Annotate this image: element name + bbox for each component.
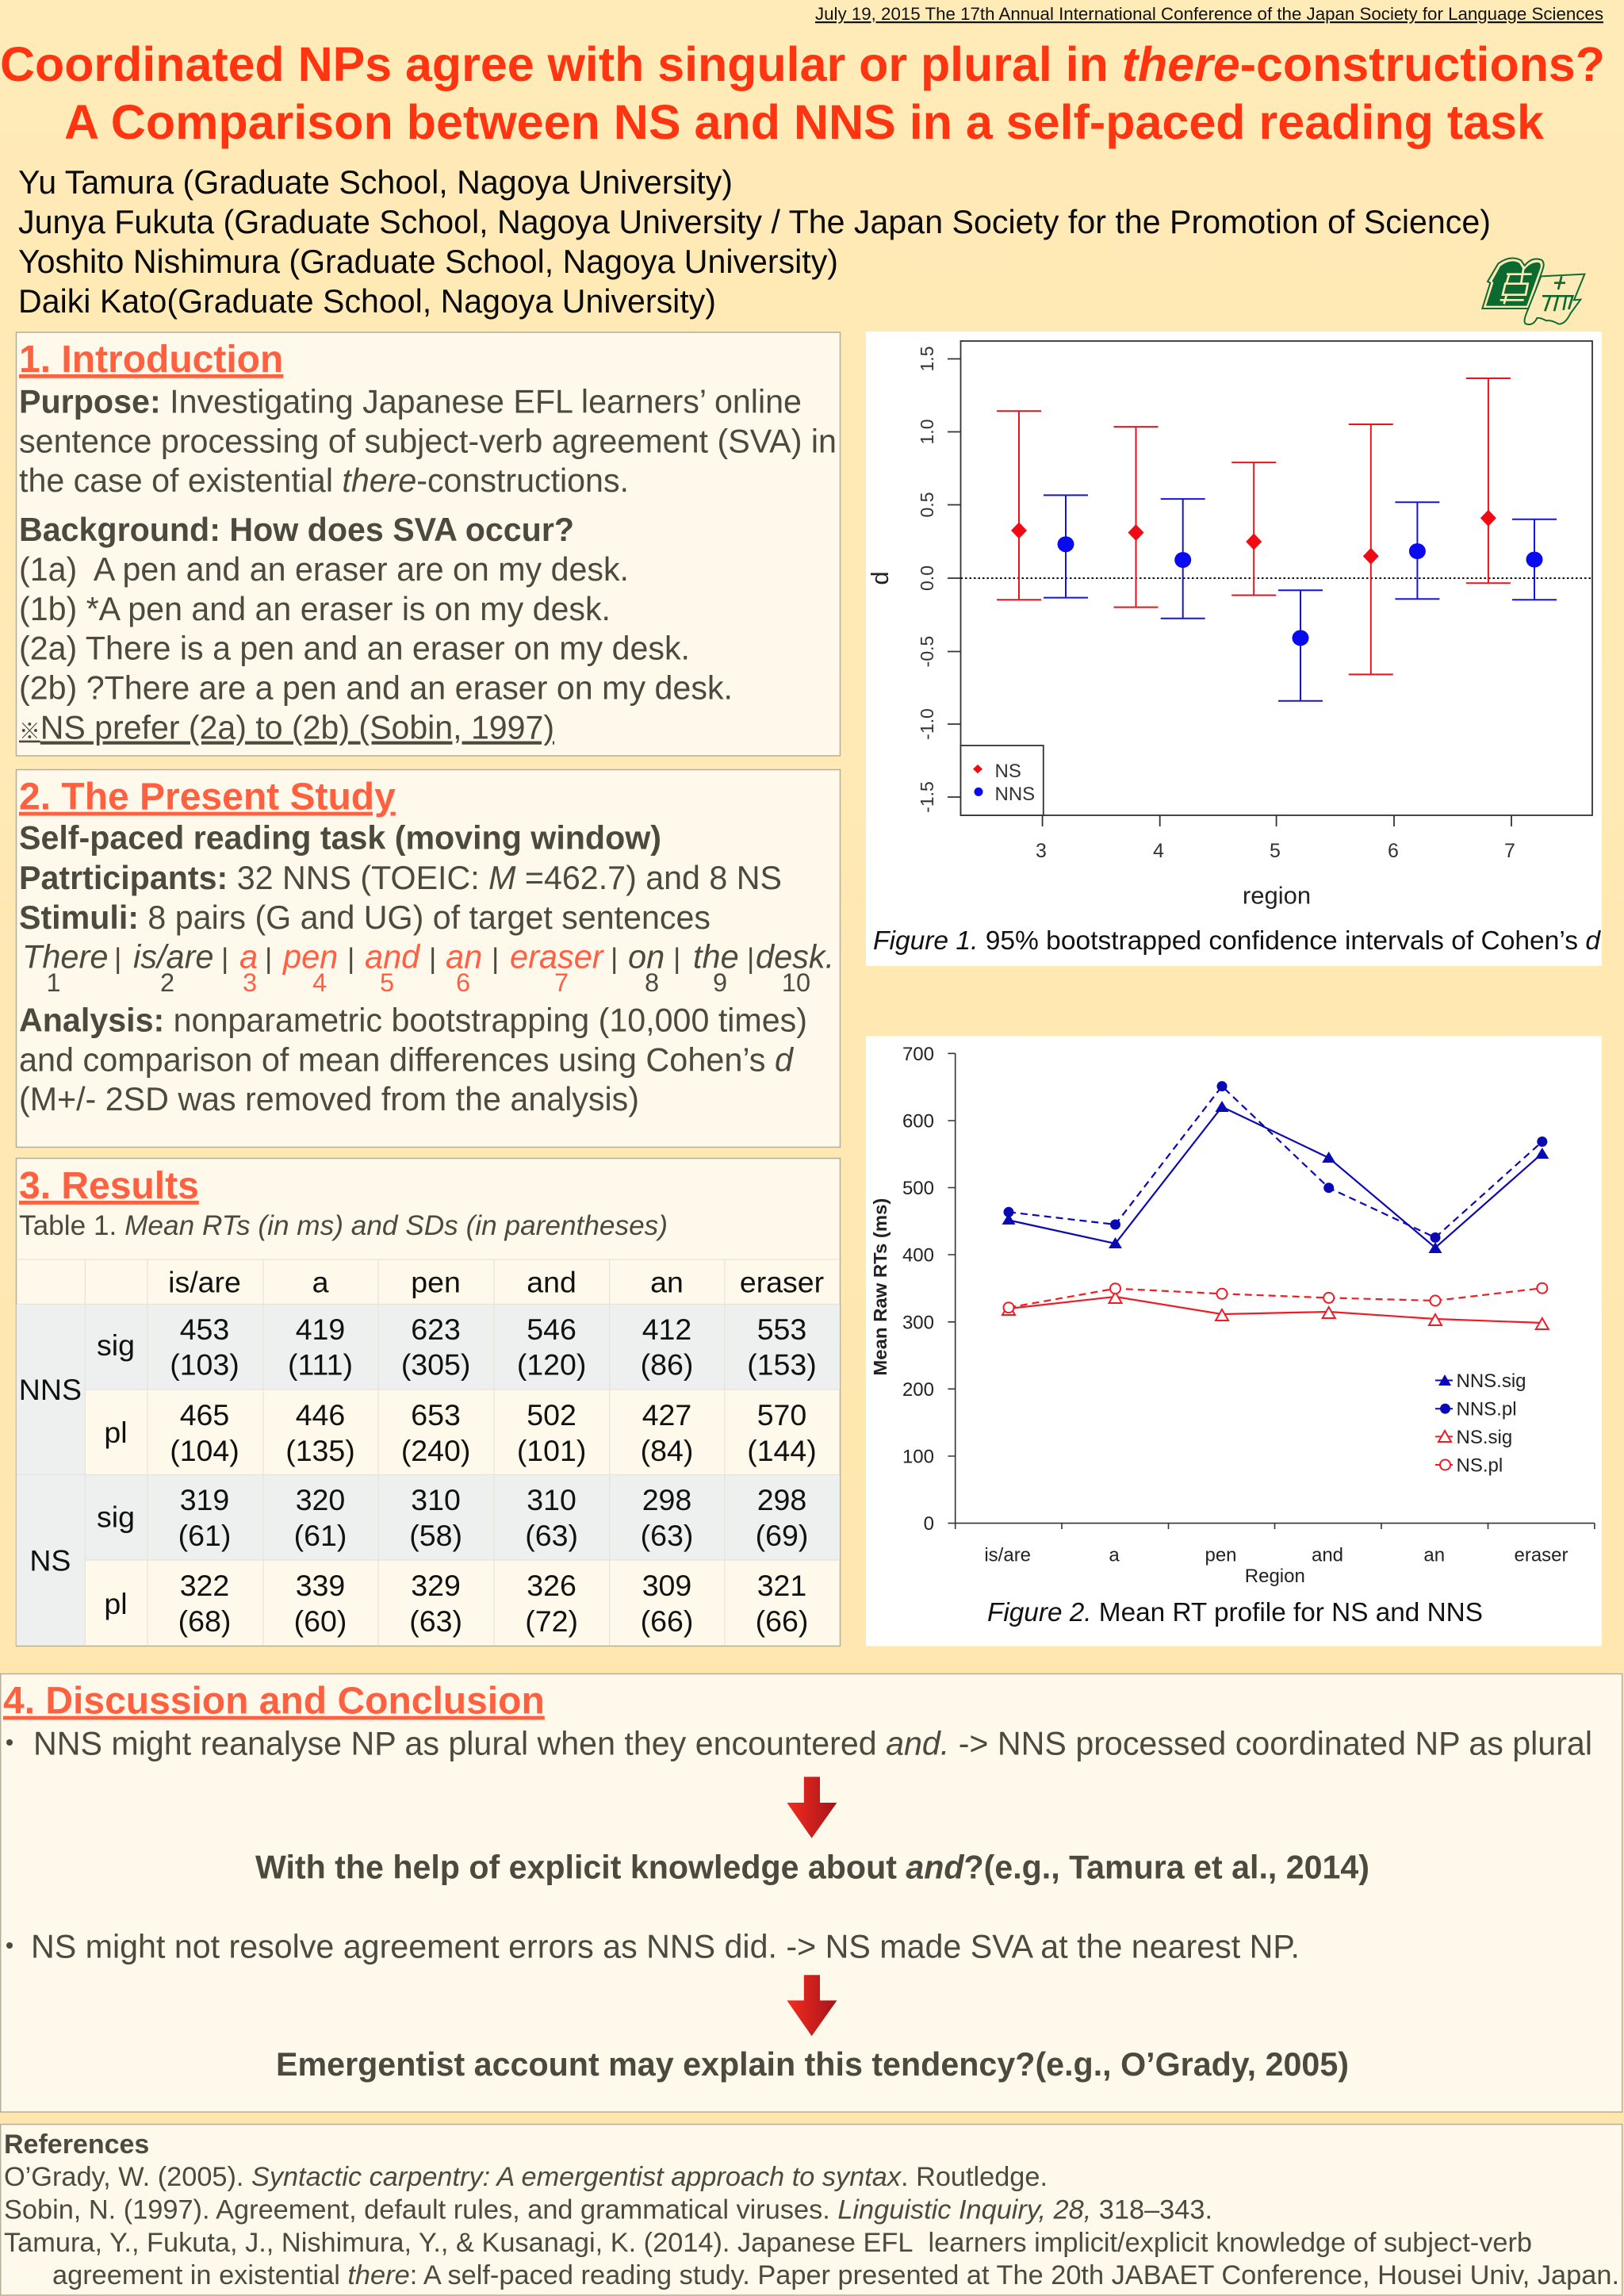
example sentence with regions: |: [673, 942, 680, 975]
chart: confidence intervals of Cohen's d: 6: [1388, 840, 1399, 862]
icon: university logo: [1482, 258, 1584, 324]
text: background examples: ※NS prefer (2a) to (2b) (Sobin, 1997): [19, 709, 554, 746]
table of mean RTs: (63): [641, 1519, 693, 1552]
table of mean RTs: (63): [525, 1519, 578, 1552]
reference list: O’Grady, W. (2005). Syntactic carpentry: A emergentist approach to syntax. Routledge.: [4, 2162, 1048, 2192]
table of mean RTs: 320: [296, 1483, 345, 1516]
text: method lines: [19, 819, 782, 936]
text: method lines: Stimuli: 8 pairs (G and UG) of target sentences: [19, 899, 710, 936]
region numbers: [46, 968, 810, 997]
table of mean RTs: 298: [757, 1483, 806, 1516]
example sentence with regions: a: [239, 938, 258, 976]
chart: confidence intervals of Cohen's d: 1.0: [917, 420, 937, 444]
table of mean RTs: sig: [97, 1328, 135, 1362]
table of mean RTs: (66): [641, 1604, 693, 1638]
region numbers: 9: [713, 968, 727, 997]
text: purpose: sentence processing of subject-verb agreement (SVA) in: [19, 422, 837, 459]
table of mean RTs: 453: [180, 1313, 229, 1346]
line chart: mean RT profile: 200: [902, 1379, 934, 1401]
chart: confidence intervals of Cohen's d: 4: [1153, 840, 1164, 862]
table of mean RTs: 321: [757, 1569, 806, 1602]
table caption: Table 1. Mean RTs (in ms) and SDs (in parentheses): [19, 1210, 668, 1241]
table of mean RTs: 310: [411, 1483, 461, 1516]
title: Coordinated NPs agree with singular or plural in there-constructions?: [0, 37, 1605, 91]
region numbers: 4: [312, 968, 327, 997]
text: method lines: Self-paced reading task (moving window): [19, 819, 661, 857]
reference list: Tamura, Y., Fukuta, J., Nishimura, Y., & Kusanagi, K. (2014). Japanese EFL learners implicit/explicit knowledge of subject-verb: [4, 2228, 1532, 2258]
table of mean RTs: pen: [411, 1266, 461, 1299]
chart: confidence intervals of Cohen's d: -0.5: [917, 636, 937, 667]
panel: introduction: [16, 332, 841, 756]
table of mean RTs: 546: [527, 1313, 576, 1346]
table of mean RTs: (240): [401, 1434, 470, 1467]
table of mean RTs: a: [312, 1266, 329, 1299]
table of mean RTs: (120): [517, 1348, 586, 1382]
table of mean RTs: (104): [170, 1434, 239, 1467]
heading: introduction: 1. Introduction: [19, 339, 283, 381]
authors: Daiki Kato(Graduate School, Nagoya University): [18, 282, 716, 320]
conclusion: emergentist account: Emergentist account may explain this tendency?(e.g., O’Grady, 2005): [276, 2045, 1349, 2083]
chart: confidence intervals of Cohen's d: 1.5: [917, 347, 937, 371]
table of mean RTs: sig: [97, 1501, 135, 1534]
example sentence with regions: |: [347, 942, 354, 975]
legend: [1435, 1370, 1526, 1477]
legend: NNS.pl: [1456, 1399, 1517, 1420]
table of mean RTs: 553: [757, 1313, 806, 1346]
table of mean RTs: 419: [296, 1313, 345, 1346]
table of mean RTs: (66): [756, 1604, 808, 1638]
legend: NNS: [994, 784, 1035, 805]
line chart: mean RT profile: Mean Raw RTs (ms): [870, 1198, 891, 1376]
chart: confidence intervals of Cohen's d: -1.5: [917, 781, 937, 813]
table of mean RTs: (135): [285, 1434, 355, 1467]
chart: confidence intervals of Cohen's d: 3: [1036, 840, 1047, 862]
line chart: mean RT profile: [870, 1044, 1595, 1587]
table of mean RTs: [17, 1259, 840, 1645]
table of mean RTs: (58): [409, 1519, 462, 1552]
text: background examples: (2b) ?There are a pen and an eraser on my desk.: [19, 669, 733, 706]
table of mean RTs: (111): [288, 1348, 353, 1382]
table of mean RTs: 322: [180, 1569, 229, 1602]
line chart: mean RT profile: 500: [902, 1178, 934, 1199]
arrow: [787, 1975, 837, 2036]
table of mean RTs: (305): [401, 1348, 470, 1382]
line chart: mean RT profile: 700: [902, 1044, 934, 1065]
region numbers: 3: [243, 968, 257, 997]
table of mean RTs: (68): [178, 1604, 231, 1638]
line chart: mean RT profile: 400: [902, 1245, 934, 1266]
example sentence with regions: There: [22, 938, 108, 976]
line chart: mean RT profile: 300: [902, 1312, 934, 1333]
text: purpose: the case of existential there-constructions.: [19, 462, 629, 499]
reference list: [4, 2162, 1619, 2290]
table of mean RTs: 623: [411, 1313, 461, 1346]
region numbers: 7: [554, 968, 569, 997]
table of mean RTs: pl: [104, 1416, 128, 1449]
table of mean RTs: (60): [294, 1604, 347, 1638]
references heading: References: [4, 2129, 149, 2160]
line chart: mean RT profile: pen: [1205, 1545, 1237, 1566]
bullet: NNS reanalysis: NNS might reanalyse NP as plural when they encountered and. -> NNS processed coordinated NP as plural: [33, 1724, 1592, 1762]
example sentence with regions: |: [611, 942, 618, 975]
table of mean RTs: an: [650, 1266, 684, 1299]
example sentence with regions: |: [221, 942, 228, 975]
conclusion: explicit knowledge: With the help of explicit knowledge about and?(e.g., Tamura et al., 2014): [255, 1848, 1369, 1886]
table of mean RTs: 298: [642, 1483, 691, 1516]
table of mean RTs: 339: [296, 1569, 345, 1602]
region numbers: 6: [456, 968, 470, 997]
line chart: mean RT profile: is/are: [984, 1545, 1031, 1566]
text: analysis: (M+/- 2SD was removed from the analysis): [19, 1080, 639, 1117]
line chart: mean RT profile: and: [1312, 1545, 1343, 1566]
title: [0, 37, 1605, 149]
text: analysis: Analysis: nonparametric bootstrapping (10,000 times): [19, 1002, 807, 1039]
table of mean RTs: (61): [178, 1519, 231, 1552]
line chart: mean RT profile: 100: [902, 1447, 934, 1467]
table of mean RTs: (153): [747, 1348, 817, 1382]
region numbers: 8: [645, 968, 659, 997]
text: analysis: [19, 1002, 807, 1117]
table of mean RTs: (144): [747, 1434, 817, 1467]
table of mean RTs: 653: [411, 1398, 461, 1432]
legend: [961, 746, 1044, 815]
example sentence with regions: [22, 938, 834, 976]
example sentence with regions: |: [429, 942, 436, 975]
table of mean RTs: NNS: [19, 1373, 82, 1406]
figure 2 caption: Figure 2. Mean RT profile for NS and NNS: [987, 1598, 1483, 1627]
table of mean RTs: (103): [170, 1348, 239, 1382]
example sentence with regions: eraser: [510, 938, 605, 976]
bullet: NS agreement: NS might not resolve agreement errors as NNS did. -> NS made SVA at the nearest NP.: [31, 1927, 1300, 1965]
chart: confidence intervals of Cohen's d: region: [1243, 882, 1311, 910]
line chart: mean RT profile: an: [1423, 1545, 1445, 1566]
table of mean RTs: (101): [517, 1434, 586, 1467]
table of mean RTs: and: [527, 1266, 576, 1299]
table of mean RTs: 310: [527, 1483, 576, 1516]
table of mean RTs: 309: [642, 1569, 691, 1602]
line chart: mean RT profile: 600: [902, 1110, 934, 1133]
table of mean RTs: 329: [411, 1569, 461, 1602]
table of mean RTs: 326: [527, 1569, 576, 1602]
region numbers: 10: [782, 968, 810, 997]
table of mean RTs: (69): [756, 1519, 808, 1552]
conference date line: July 19, 2015 The 17th Annual International Conference of the Japan Society for Language Sciences: [815, 4, 1603, 24]
chart: confidence intervals of Cohen's d: 0.5: [917, 493, 937, 517]
example sentence with regions: |: [114, 942, 121, 975]
text: purpose: [19, 382, 837, 499]
chart: confidence intervals of Cohen's d: d: [866, 571, 894, 585]
line chart: mean RT profile: eraser: [1514, 1545, 1568, 1566]
panel: the present study: [16, 769, 841, 1147]
legend: NNS.sig: [1456, 1370, 1526, 1392]
table of mean RTs: (84): [641, 1434, 693, 1467]
title: A Comparison between NS and NNS in a self-paced reading task: [64, 95, 1544, 149]
reference list: agreement in existential there: A self-paced reading study. Paper presented at The 20th JABAET Conference, Housei Univ, Japan.: [52, 2260, 1619, 2290]
text: purpose: Purpose: Investigating Japanese EFL learners’ online: [19, 382, 802, 420]
authors: Yu Tamura (Graduate School, Nagoya University): [18, 163, 733, 201]
text: background examples: (1a) A pen and an eraser are on my desk.: [19, 550, 629, 588]
heading: results: 3. Results: [19, 1165, 199, 1207]
region numbers: 2: [160, 968, 174, 997]
text: background examples: (2a) There is a pen and an eraser on my desk.: [19, 630, 690, 667]
panel: results: [16, 1158, 841, 1646]
text: background examples: Background: How does SVA occur?: [19, 511, 574, 548]
heading: discussion: 4. Discussion and Conclusion: [3, 1681, 545, 1723]
example sentence with regions: on: [628, 938, 665, 976]
chart: confidence intervals of Cohen's d: 0.0: [917, 565, 937, 591]
table of mean RTs: eraser: [740, 1266, 824, 1299]
table of mean RTs: NS: [29, 1544, 71, 1577]
line chart: mean RT profile: a: [1109, 1545, 1120, 1566]
region numbers: 5: [380, 968, 394, 997]
heading: present study: 2. The Present Study: [19, 776, 396, 818]
figure 1 caption: Figure 1. 95% bootstrapped confidence intervals of Cohen’s d: [873, 926, 1601, 956]
table of mean RTs: (61): [294, 1519, 347, 1552]
legend: NS: [994, 761, 1021, 782]
table of mean RTs: is/are: [168, 1266, 241, 1299]
example sentence with regions: is/are: [133, 938, 213, 976]
chart: confidence intervals of Cohen's d: 7: [1504, 840, 1515, 862]
line chart: mean RT profile: Region: [1245, 1566, 1305, 1587]
table of mean RTs: 570: [757, 1398, 806, 1432]
table of mean RTs: (72): [525, 1604, 578, 1638]
authors: [18, 163, 1491, 320]
table of mean RTs: 319: [180, 1483, 229, 1516]
example sentence with regions: and: [365, 938, 421, 976]
table of mean RTs: 412: [642, 1313, 691, 1346]
example sentence with regions: |: [265, 942, 272, 975]
example sentence with regions: |: [492, 942, 499, 975]
region numbers: 1: [46, 968, 61, 997]
text: method lines: Patrticipants: 32 NNS (TOEIC: M =462.7) and 8 NS: [19, 859, 782, 896]
example sentence with regions: the: [693, 938, 739, 976]
panel: discussion and conclusion: [1, 1673, 1622, 2112]
example sentence with regions: |: [747, 942, 754, 975]
text: background examples: (1b) *A pen and an eraser is on my desk.: [19, 590, 611, 627]
authors: Yoshito Nishimura (Graduate School, Nagoya University): [18, 243, 838, 280]
table of mean RTs: (63): [409, 1604, 462, 1638]
reference list: Sobin, N. (1997). Agreement, default rules, and grammatical viruses. Linguistic Inquiry, 28, 318–343.: [4, 2195, 1212, 2225]
legend: NS.pl: [1456, 1455, 1503, 1477]
example sentence with regions: an: [446, 938, 482, 976]
table of mean RTs: (86): [641, 1348, 693, 1382]
table of mean RTs: 427: [642, 1398, 691, 1432]
table of mean RTs: 465: [180, 1398, 229, 1432]
legend: NS.sig: [1456, 1427, 1512, 1448]
panel: figure 1: [866, 332, 1602, 966]
arrow: [787, 1777, 837, 1838]
panel: references: [1, 2124, 1622, 2295]
example sentence with regions: pen: [282, 938, 338, 976]
chart: confidence intervals of Cohen's d: [866, 341, 1592, 910]
panel: figure 2: [866, 1036, 1602, 1646]
table of mean RTs: 446: [296, 1398, 345, 1432]
text: analysis: and comparison of mean differences using Cohen’s d: [19, 1041, 795, 1079]
text: background examples: [19, 511, 733, 746]
table of mean RTs: 502: [527, 1398, 576, 1432]
chart: confidence intervals of Cohen's d: -1.0: [917, 708, 937, 740]
table of mean RTs: pl: [104, 1587, 128, 1620]
line chart: mean RT profile: 0: [924, 1513, 934, 1535]
authors: Junya Fukuta (Graduate School, Nagoya University / The Japan Society for the Promotion of Science): [18, 203, 1491, 240]
chart: confidence intervals of Cohen's d: 5: [1270, 840, 1281, 862]
example sentence with regions: desk.: [756, 938, 834, 976]
